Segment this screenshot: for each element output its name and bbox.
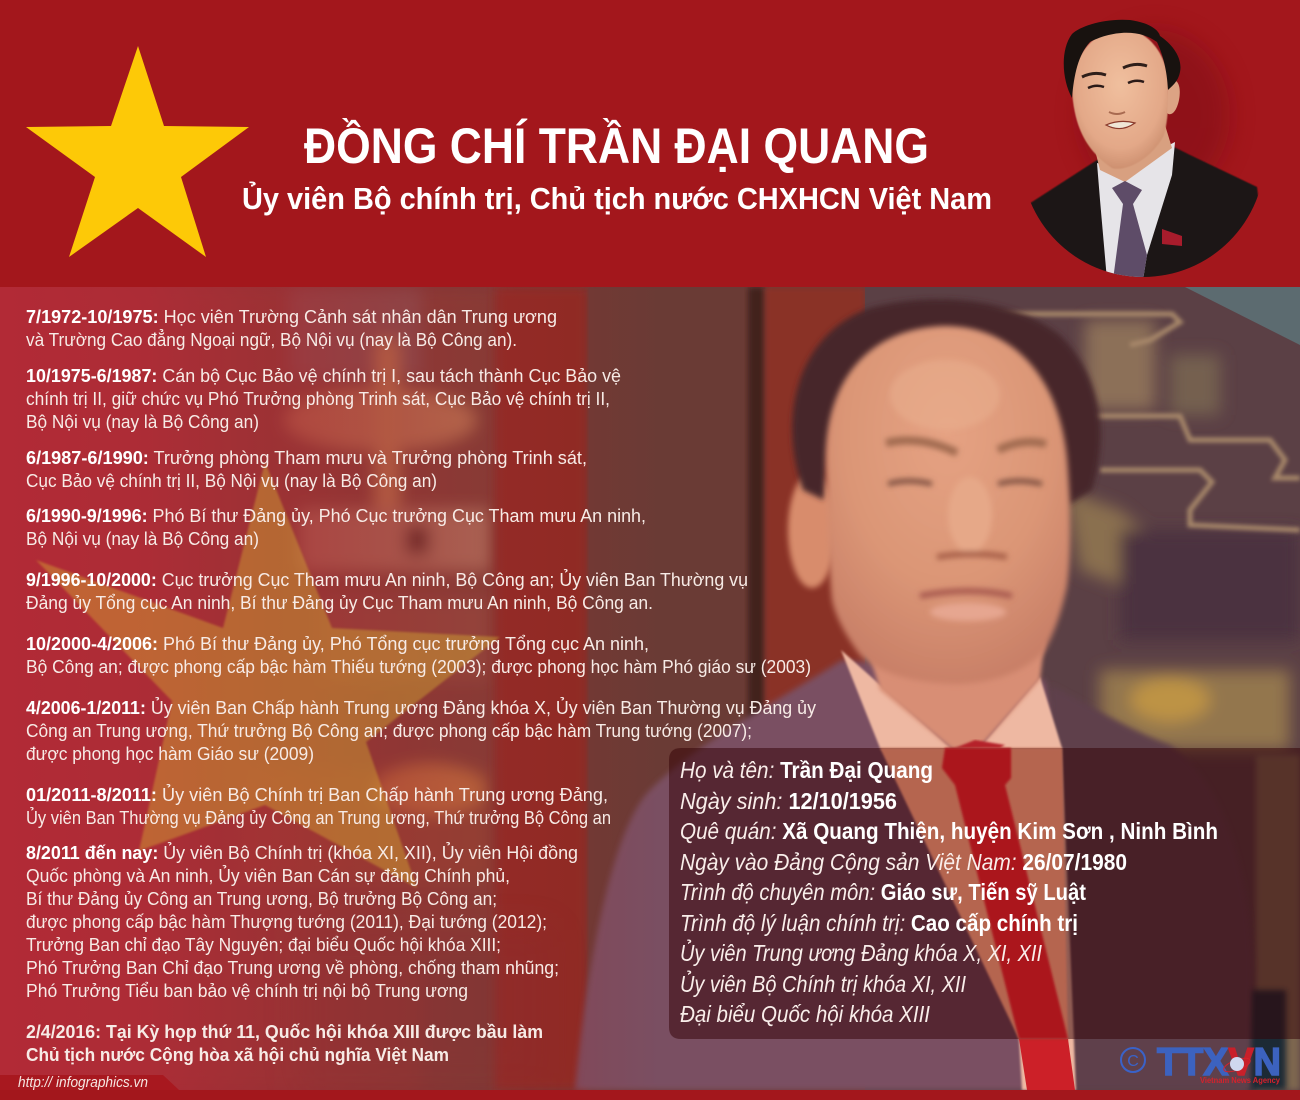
entry 2006-2011 — [26, 697, 816, 764]
entry 1975-1987 — [26, 366, 621, 432]
brown panel — [588, 290, 592, 964]
panel: personal details: Họ và tên: Trần Đại Quang — [680, 757, 933, 783]
entry 2006-2011: được phong học hàm Giáo sư (2009) — [26, 744, 314, 764]
panel: personal details: Trình độ lý luận chính trị: Cao cấp chính trị — [680, 910, 1078, 936]
entry 1987-1990: 6/1987-6/1990: Trưởng phòng Tham mưu và Trưởng phòng Trinh sát, — [26, 448, 587, 468]
panel: personal details — [669, 748, 1300, 1039]
entry 2/4/2016: 2/4/2016: Tại Kỳ họp thứ 11, Quốc hội khóa XIII được bầu làm — [26, 1022, 543, 1042]
background photo — [0, 287, 1300, 1090]
portrait photo — [1030, 20, 1258, 277]
entry 1975-1987: Bộ Nội vụ (nay là Bộ Công an) — [26, 412, 259, 432]
entry 1996-2000: Đảng ủy Tổng cục An ninh, Bí thư Đảng ủy Cục Tham mưu An ninh, Bộ Công an. — [26, 593, 653, 613]
ear — [788, 472, 836, 588]
entry 1990-1996: Bộ Nội vụ (nay là Bộ Công an) — [26, 529, 259, 549]
logo: TTXVN: C — [1127, 1053, 1139, 1070]
red panel — [495, 287, 588, 1090]
entry 2011: Ủy viên Ban Thường vụ Đảng ủy Công an Trung ương, Thứ trưởng Bộ Công an — [26, 807, 611, 828]
footer band — [0, 1090, 1300, 1100]
entry 2/4/2016: Chủ tịch nước Cộng hòa xã hội chủ nghĩa Việt Nam — [26, 1045, 449, 1065]
entry 2011 to now: 8/2011 đến nay: Ủy viên Bộ Chính trị (khóa XI, XII), Ủy viên Hội đồng — [26, 842, 578, 863]
entry 1990-1996: 6/1990-9/1996: Phó Bí thư Đảng ủy, Phó Cục trưởng Cục Tham mưu An ninh, — [26, 506, 646, 526]
entry 2011 to now: Phó Trưởng Tiểu ban bảo vệ chính trị nội bộ Trung ương — [26, 981, 468, 1001]
source tab: http:// infographics.vn — [18, 1074, 148, 1091]
header band — [0, 0, 1300, 287]
entry 1975-1987: 10/1975-6/1987: Cán bộ Cục Bảo vệ chính trị I, sau tách thành Cục Bảo vệ — [26, 366, 621, 386]
icon: yellow star — [26, 46, 249, 257]
logo: TTXVN: TTXVN — [1157, 1041, 1281, 1084]
left red fade — [0, 287, 555, 1090]
entry 1996-2000: 9/1996-10/2000: Cục trưởng Cục Tham mưu An ninh, Bộ Công an; Ủy viên Ban Thường vụ — [26, 569, 748, 590]
timeline text — [26, 307, 816, 1065]
entry 2000-2006: 10/2000-4/2006: Phó Bí thư Đảng ủy, Phó Tổng cục trưởng Tổng cục An ninh, — [26, 634, 649, 654]
panel: personal details: Ủy viên Trung ương Đảng khóa X, XI, XII — [680, 938, 1043, 966]
entry 2/4/2016 — [26, 1022, 543, 1065]
hair — [792, 299, 1101, 505]
panel: personal details: Trình độ chuyên môn: Giáo sư, Tiến sỹ Luật — [680, 879, 1086, 905]
face — [826, 326, 1070, 684]
entry 2011 — [26, 784, 611, 828]
title: ĐỒNG CHÍ TRẦN ĐẠI QUANG — [304, 118, 929, 174]
entry 2011 to now — [26, 842, 578, 1001]
entry 2006-2011: Công an Trung ương, Thứ trưởng Bộ Công an; được phong cấp bậc hàm Trung tướng (2007); — [26, 721, 752, 741]
entry 1972-1975 — [26, 307, 557, 350]
entry 1987-1990 — [26, 448, 587, 491]
subtitle: Ủy viên Bộ chính trị, Chủ tịch nước CHXHCN Việt Nam — [242, 180, 992, 216]
panel: personal details: Ủy viên Bộ Chính trị khóa XI, XII — [680, 969, 967, 997]
right wall lower — [1256, 755, 1300, 1090]
entry 1975-1987: chính trị II, giữ chức vụ Phó Trưởng phòng Trinh sát, Cục Bảo vệ chính trị II, — [26, 389, 610, 409]
entry 2000-2006: Bộ Công an; được phong cấp bậc hàm Thiếu tướng (2003); được phong học hàm Phó giáo sư (2003) — [26, 657, 811, 677]
shirt — [841, 650, 1076, 1090]
entry 1972-1975: 7/1972-10/1975: Học viên Trường Cảnh sát nhân dân Trung ương — [26, 307, 557, 327]
entry 2006-2011: 4/2006-1/2011: Ủy viên Ban Chấp hành Trung ương Đảng khóa X, Ủy viên Ban Thường vụ Đảng ủy — [26, 697, 816, 718]
entry 1996-2000 — [26, 569, 748, 613]
wall tapestry — [865, 287, 1300, 1090]
suit — [575, 660, 1070, 1090]
tie below panel — [1019, 1039, 1075, 1090]
entry 1972-1975: và Trường Cao đẳng Ngoại ngữ, Bộ Nội vụ (nay là Bộ Công an). — [26, 329, 517, 350]
panel: personal details: Đại biểu Quốc hội khóa XIII — [680, 1001, 931, 1027]
panel: personal details: Quê quán: Xã Quang Thiện, huyện Kim Sơn , Ninh Bình — [680, 818, 1218, 844]
entry 1990-1996 — [26, 506, 646, 549]
panel: personal details: Ngày vào Đảng Cộng sản Việt Nam: 26/07/1980 — [680, 849, 1127, 875]
neck — [865, 640, 1045, 750]
entry 1987-1990: Cục Bảo vệ chính trị II, Bộ Nội vụ (nay là Bộ Công an) — [26, 471, 437, 491]
entry 2011: 01/2011-8/2011: Ủy viên Bộ Chính trị Ban Chấp hành Trung ương Đảng, — [26, 784, 608, 805]
entry 2011 to now: Bí thư Đảng ủy Công an Trung ương, Bộ trưởng Bộ Công an; — [26, 889, 497, 909]
panel: personal details: Ngày sinh: 12/10/1956 — [680, 788, 897, 814]
left tapestry area — [252, 287, 496, 938]
entry 2011 to now: Trưởng Ban chỉ đạo Tây Nguyên; đại biểu Quốc hội khóa XIII; — [26, 935, 501, 955]
entry 2011 to now: Phó Trưởng Ban Chỉ đạo Trung ương về phòng, chống tham nhũng; — [26, 958, 559, 978]
entry 2011 to now: được phong cấp bậc hàm Thượng tướng (2011), Đại tướng (2012); — [26, 912, 547, 932]
logo: TTXVN: Vietnam News Agency — [1200, 1076, 1281, 1085]
entry 2011 to now: Quốc phòng và An ninh, Ủy viên Ban Cán sự đảng Chính phủ, — [26, 865, 510, 886]
entry 2000-2006 — [26, 634, 811, 677]
faint star — [36, 462, 500, 888]
